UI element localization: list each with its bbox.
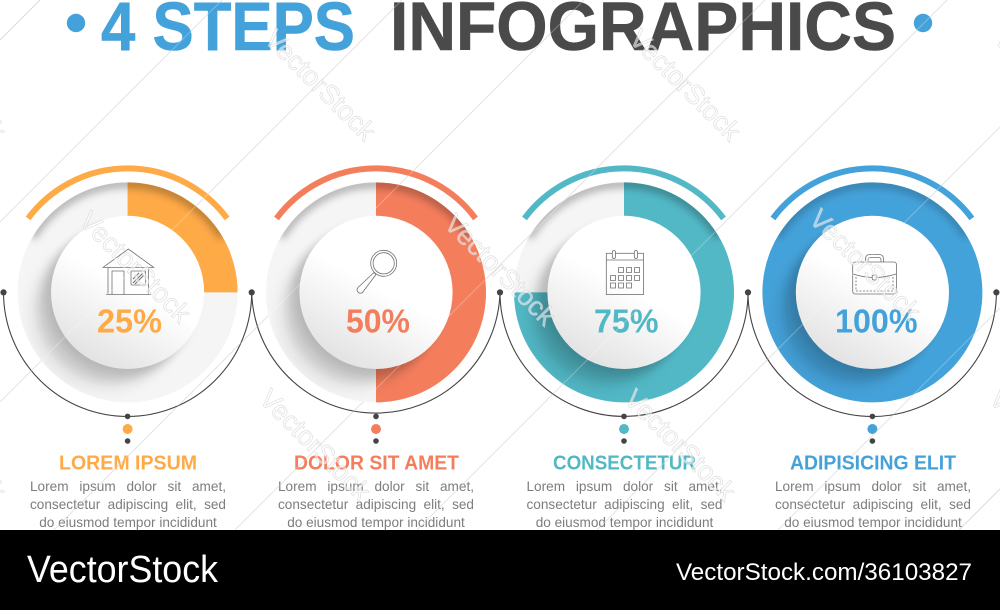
text block: Lorem ipsum dolor sit amet, (775, 479, 971, 494)
watermarks (0, 23, 1000, 507)
percentage 100%: 100% (835, 304, 918, 341)
connector dots (497, 289, 627, 444)
panel: step 1 lorem ipsum 25% (0, 168, 252, 534)
connector dots (745, 289, 1000, 444)
text block (30, 478, 226, 534)
inner circle (51, 216, 204, 369)
footer logo text: VectorStock (27, 549, 219, 591)
connector arc (252, 292, 500, 413)
connector dots (249, 289, 379, 444)
percentage 75%: 75% (594, 304, 658, 341)
donut chart 100% (762, 182, 982, 402)
top arc (524, 168, 724, 218)
color dot (867, 424, 877, 434)
watermarks: VectorStock (438, 208, 562, 332)
text block: Lorem ipsum dolor sit amet, (30, 479, 226, 494)
text block: consectetur adipiscing elit, sed (30, 497, 226, 512)
donut chart 75% (514, 182, 734, 402)
connector dots (0, 289, 130, 444)
inner circle (299, 216, 453, 369)
heading: DOLOR SIT AMET (294, 452, 459, 474)
title left bullet (67, 14, 85, 32)
panel: step 3 consectetur 75% (497, 168, 748, 534)
inner circle (796, 216, 949, 369)
top arc (28, 168, 227, 218)
donut chart 50% (266, 182, 486, 402)
watermarks: VectorStock (258, 23, 382, 147)
text block: Lorem ipsum dolor sit amet, (278, 479, 474, 494)
heading: ADIPISICING ELIT (790, 452, 956, 474)
top arc (276, 168, 476, 218)
watermarks: VectorStock (623, 23, 747, 147)
connector arc (4, 292, 252, 416)
footer url: VectorStock.com/36103827 (676, 559, 972, 586)
watermarks: VectorStock (618, 383, 742, 507)
text block: do eiusmod tempor incididunt (287, 515, 465, 530)
inner circle (547, 216, 701, 369)
text block: Lorem ipsum dolor sit amet, (526, 479, 722, 494)
text block: do eiusmod tempor incididunt (784, 515, 962, 530)
text block (278, 478, 474, 534)
icon: calendar (606, 250, 644, 294)
percentage 50%: 50% (346, 304, 410, 341)
icon: house (103, 249, 154, 294)
text block: consectetur adipiscing elit, sed (775, 497, 971, 512)
icon: magnifying glass (357, 250, 397, 293)
connector arc (500, 292, 748, 416)
color dot (619, 424, 629, 434)
watermarks: VectorStock (73, 205, 197, 329)
footer bar (0, 530, 1000, 610)
text block (526, 478, 722, 534)
icon: briefcase (853, 254, 896, 294)
title (67, 0, 932, 65)
color dot (123, 424, 133, 434)
connector arc (748, 292, 996, 417)
title right bullet (914, 14, 932, 32)
top arc (773, 168, 972, 218)
percentage 25%: 25% (97, 304, 162, 341)
text block: consectetur adipiscing elit, sed (278, 497, 474, 512)
heading: CONSECTETUR (553, 452, 697, 474)
panel: step 2 dolor sit amet 50% (249, 168, 500, 534)
text block: consectetur adipiscing elit, sed (526, 497, 722, 512)
donut chart 25% (18, 182, 238, 402)
color dot (371, 424, 381, 434)
panel: step 4 adipisicing elit 100% (745, 168, 1000, 534)
watermarks: VectorStock (253, 383, 377, 507)
watermarks: VectorStock (803, 203, 927, 327)
text block: do eiusmod tempor incididunt (39, 515, 217, 530)
heading: LOREM IPSUM (59, 452, 197, 474)
text block (775, 478, 971, 534)
text block: do eiusmod tempor incididunt (536, 515, 713, 530)
